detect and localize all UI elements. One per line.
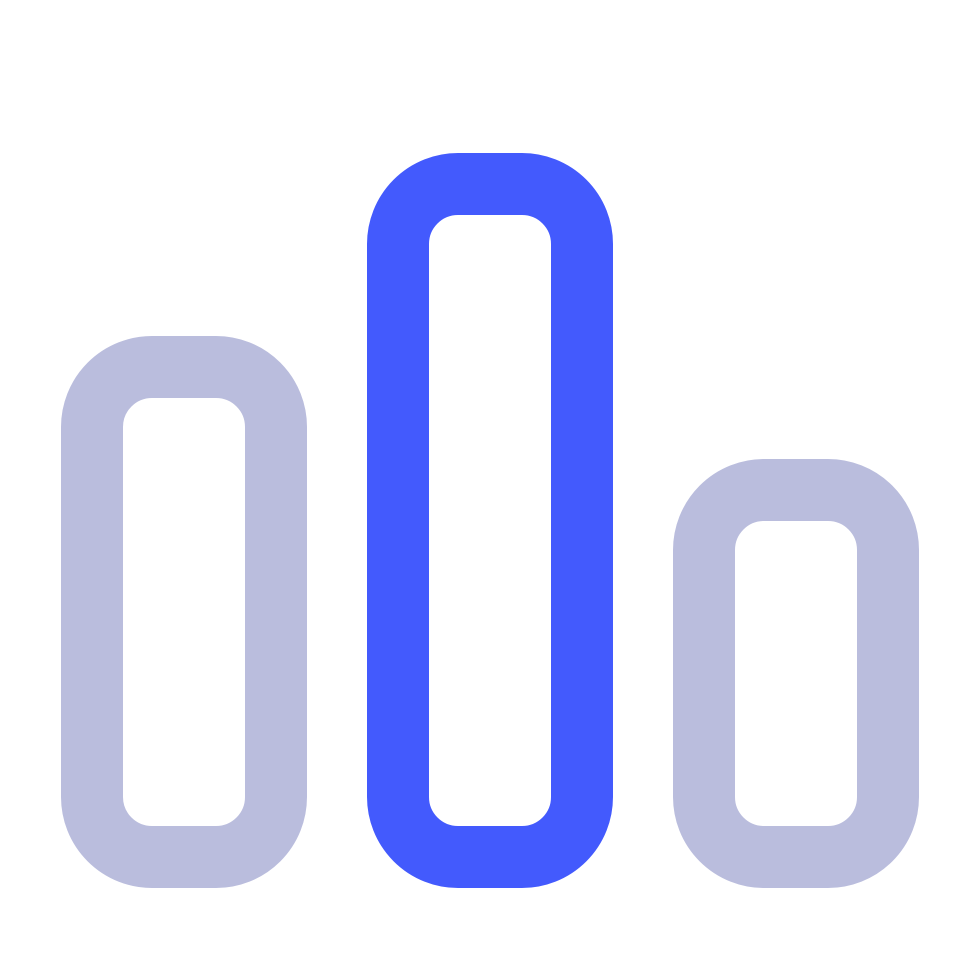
icon: right bar bbox=[704, 490, 888, 857]
icon: left bar bbox=[92, 367, 276, 857]
icon: center bar bbox=[398, 184, 582, 857]
